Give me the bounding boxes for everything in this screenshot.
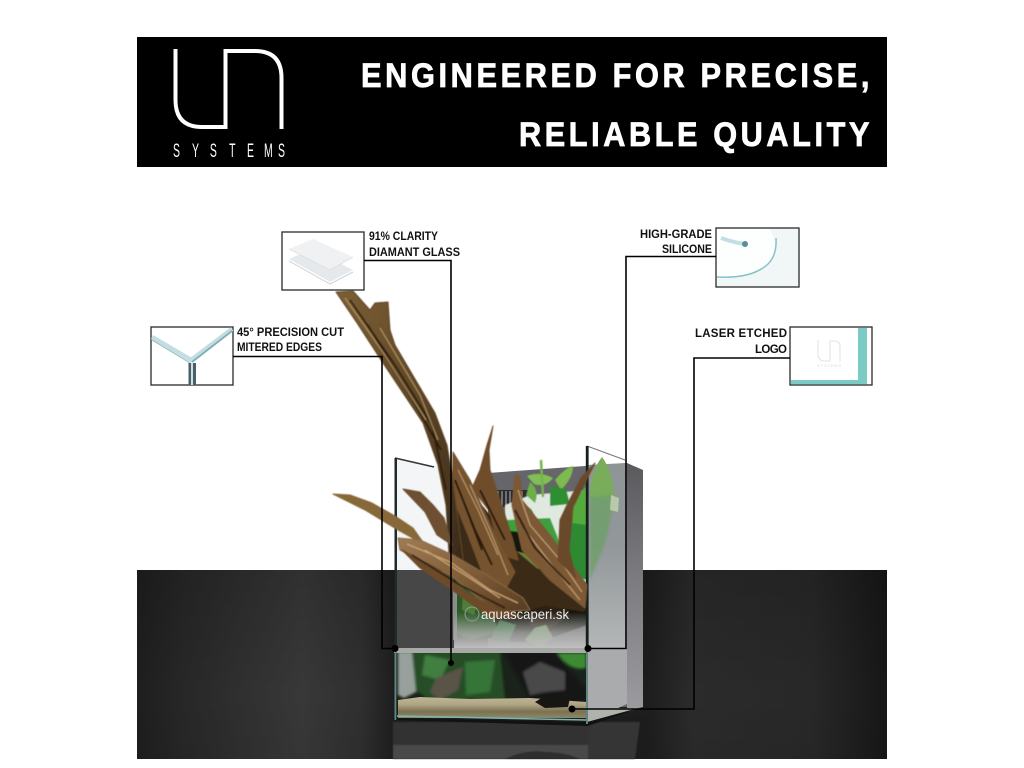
central wood mass (447, 470, 587, 612)
label (640, 229, 712, 256)
title: ENGINEERED FOR PRECISE, (361, 57, 873, 95)
left tip limb (333, 494, 425, 545)
label: HIGH-GRADE (640, 229, 712, 241)
mist above waterline (453, 612, 587, 650)
leader line (364, 260, 454, 666)
thumbnail: glass sheets (282, 232, 364, 290)
leader line (233, 356, 398, 652)
label (695, 328, 787, 356)
title: RELIABLE QUALITY (519, 116, 873, 154)
logo: UN Systems: SYSTEMS (173, 141, 285, 162)
lower tank water section (394, 648, 588, 718)
dark roots and moss (453, 525, 587, 648)
label (237, 327, 344, 354)
thumbnail: etched logo on glass: SYSTEMS (817, 363, 841, 368)
leader line (568, 358, 790, 712)
limb B (512, 475, 587, 608)
plants background (505, 460, 587, 590)
left glass wall (394, 458, 457, 650)
back panel (488, 463, 643, 712)
label: LOGO (755, 344, 787, 356)
callout: 45 degree mitered edges (151, 327, 398, 652)
second trunk (452, 452, 515, 590)
tank base edge (394, 707, 642, 726)
right side glass lower (587, 650, 627, 722)
limb C (558, 463, 595, 578)
main branch (336, 291, 464, 570)
callout: high-grade silicone (584, 228, 799, 652)
lower limbs (398, 538, 530, 612)
watermark: aquascaperi.sk (481, 606, 570, 622)
label: DIAMANT GLASS (369, 247, 460, 259)
label: 91% CLARITY (369, 231, 438, 243)
header banner (137, 37, 887, 167)
small limb (403, 489, 452, 545)
thumbnail: etched logo on glass (790, 327, 872, 385)
thumbnail: silicone bead (716, 228, 799, 287)
driftwood (333, 291, 595, 618)
right glass wall (586, 446, 627, 650)
label: MITERED EDGES (237, 342, 322, 354)
label: 45° PRECISION CUT (237, 327, 344, 339)
title (361, 57, 873, 154)
aquarium (333, 291, 643, 726)
leader line (584, 256, 716, 652)
thumbnail: mitered corner (151, 327, 233, 385)
callout: laser etched logo (568, 327, 872, 712)
label (369, 231, 460, 259)
upper spike (472, 426, 518, 560)
label: LASER ETCHED (695, 328, 787, 340)
label: SILICONE (662, 244, 712, 256)
floor reflection of the tank (393, 722, 640, 759)
callout: 91% clarity diamant glass (282, 231, 460, 666)
floor panel (137, 570, 887, 759)
logo: UN Systems (173, 49, 285, 162)
